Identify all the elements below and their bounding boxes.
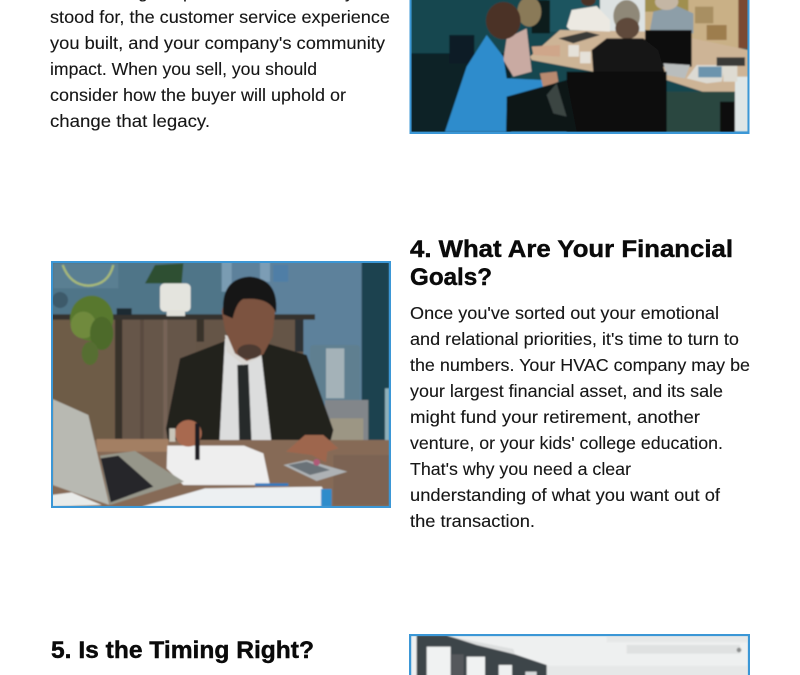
text block: legacy paragraph (end): you built, and your company's community [50,33,385,53]
text block: legacy paragraph (end): stood for, the customer service experience [50,7,390,27]
heading: section 4: Goals? [410,264,492,291]
heading: section 4 [410,236,733,291]
text block: financial goals paragraph: and relational priorities, it's time to turn to [410,329,739,349]
photo: man in suit working with calculator and laptop [51,261,391,508]
text block: financial goals paragraph: might fund your retirement, another [410,407,700,427]
text block: financial goals paragraph: the transaction. [410,511,535,531]
text block: financial goals paragraph: That's why you need a clear [410,459,631,479]
photo: team meeting around a table [410,0,749,133]
heading: section 5: 5. Is the Timing Right? [51,637,314,664]
text block: legacy paragraph (end) [50,0,390,131]
text block: financial goals paragraph: Once you've sorted out your emotional [410,303,719,323]
text block: financial goals paragraph: your largest financial asset, and its sale [410,381,723,401]
text block: legacy paragraph (end): change that legacy. [50,111,210,131]
photo: modern building exterior [409,634,750,675]
text block: financial goals paragraph: venture, or your kids' college education. [410,433,723,453]
text block: legacy paragraph (end): consider how the buyer will uphold or [50,85,346,105]
text block: financial goals paragraph: the numbers. Your HVAC company may be [410,355,750,375]
heading: section 4: 4. What Are Your Financial [410,236,733,263]
text block: financial goals paragraph: understanding of what you want out of [410,485,720,505]
text block: financial goals paragraph [410,303,750,531]
text block: legacy paragraph (end): impact. When you sell, you should [50,59,317,79]
